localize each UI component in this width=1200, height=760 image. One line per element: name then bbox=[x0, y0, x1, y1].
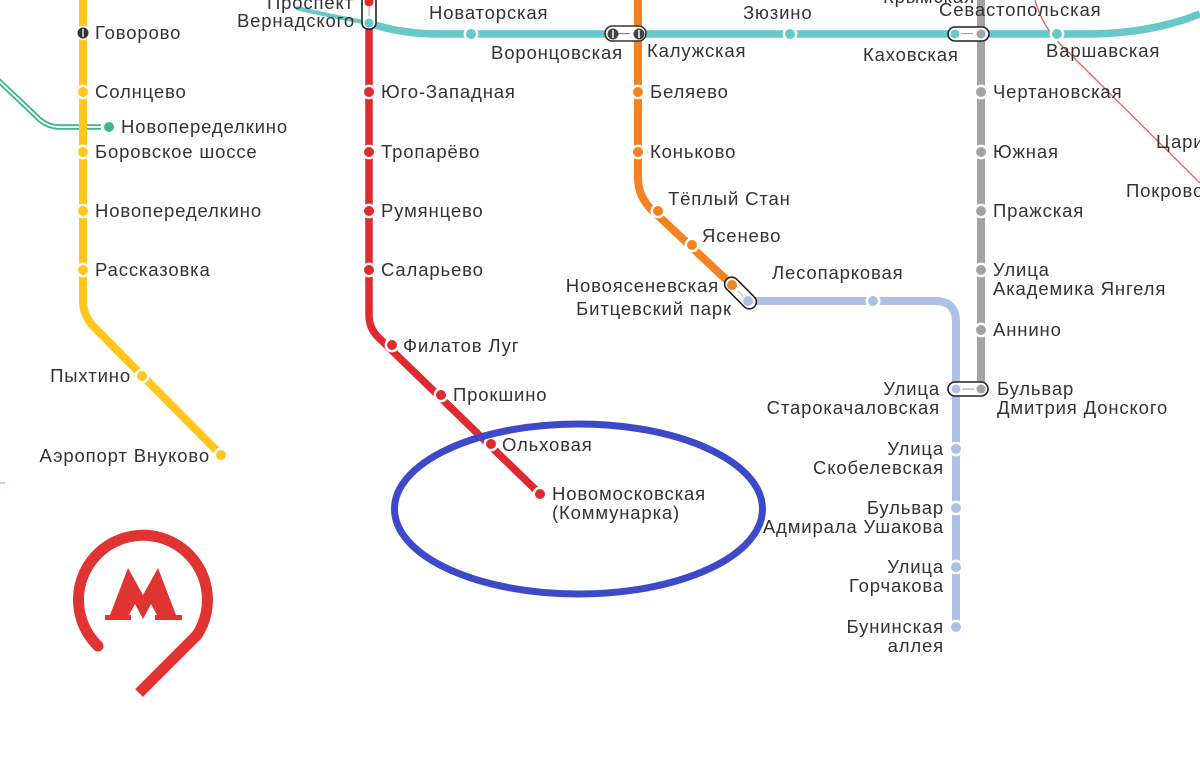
station labels: periwinkle line: Скобелевская bbox=[813, 457, 944, 478]
station labels: orange line: Коньково bbox=[650, 141, 736, 162]
interchange: Novoyasenevskaya / Bitsevsky park bbox=[722, 274, 759, 312]
station labels: periwinkle line: Адмирала Ушакова bbox=[763, 516, 944, 537]
station labels: orange line: Тёплый Стан bbox=[668, 188, 791, 209]
teal line left branch bbox=[296, 8, 369, 23]
station labels: grey line: Академика Янгеля bbox=[993, 278, 1166, 299]
station labels: yellow line: Говорово bbox=[95, 22, 181, 43]
logo start cap bbox=[92, 640, 104, 652]
interchange: Vorontsovskaya / Kaluzhskaya bbox=[605, 26, 646, 41]
station labels: periwinkle line: Старокачаловская bbox=[767, 397, 940, 418]
station labels: orange line: Новоясеневская bbox=[566, 275, 719, 296]
station labels: red line bbox=[237, 0, 706, 523]
station labels: red line: Тропарёво bbox=[381, 141, 480, 162]
station labels: right edge bbox=[1126, 131, 1200, 201]
station labels: periwinkle line: Улица bbox=[883, 378, 940, 399]
highlight ellipse bbox=[394, 424, 762, 594]
station labels: yellow line: Новопеределкино bbox=[95, 200, 262, 221]
station labels: red line: Вернадского bbox=[237, 10, 355, 31]
station labels: red line: (Коммунарка) bbox=[552, 502, 680, 523]
station labels: yellow line bbox=[40, 22, 288, 466]
thin pink line bbox=[1035, 0, 1200, 183]
station labels: grey line: Улица bbox=[993, 259, 1050, 280]
station labels: yellow line: Пыхтино bbox=[50, 365, 131, 386]
station labels: red line: Юго-Западная bbox=[381, 81, 516, 102]
grey line bbox=[977, 0, 985, 389]
logo letter M bbox=[105, 568, 182, 620]
yellow stations bbox=[77, 86, 227, 461]
red stations bbox=[363, 86, 546, 500]
station labels: orange line bbox=[566, 40, 791, 319]
interchange: Kakhovskaya / Sevastopolskaya bbox=[948, 27, 989, 41]
station labels: teal line: Варшавская bbox=[1046, 40, 1160, 61]
station labels: yellow line: Аэропорт Внуково bbox=[40, 445, 210, 466]
station labels: teal line: Новаторская bbox=[429, 2, 548, 23]
station labels: grey line: Пражская bbox=[993, 200, 1084, 221]
station labels: periwinkle line: Бунинская bbox=[847, 616, 944, 637]
station labels: red line: Саларьево bbox=[381, 259, 484, 280]
station labels: red line: Прокшино bbox=[453, 384, 547, 405]
station labels: orange line: Калужская bbox=[647, 40, 746, 61]
station labels: yellow line: Новопеределкино bbox=[121, 116, 288, 137]
station labels: teal line: Воронцовская bbox=[491, 42, 623, 63]
station labels: periwinkle line bbox=[763, 262, 944, 656]
station labels: grey line: Дмитрия Донского bbox=[997, 397, 1168, 418]
station labels: periwinkle line: аллея bbox=[888, 635, 944, 656]
interchange line to Novoperedelkino bbox=[0, 80, 101, 127]
station labels: periwinkle line: Бульвар bbox=[867, 497, 944, 518]
station labels: teal line: Каховская bbox=[863, 44, 959, 65]
periwinkle stations bbox=[867, 295, 962, 633]
station: Govorovo bbox=[76, 26, 90, 40]
station labels: red line: Ольховая bbox=[502, 434, 593, 455]
orange line bbox=[638, 0, 733, 286]
interchange: Prospekt Vernadskogo bbox=[362, 0, 376, 29]
station labels: red line: Румянцево bbox=[381, 200, 484, 221]
Novoperedelkino green station bbox=[104, 122, 114, 132]
grey stations bbox=[975, 86, 987, 336]
red line bbox=[363, 0, 546, 500]
station labels: periwinkle line: Улица bbox=[887, 556, 944, 577]
teal stations bbox=[465, 28, 1063, 40]
station labels: yellow line: Рассказовка bbox=[95, 259, 211, 280]
station labels: teal line: Зюзино bbox=[743, 2, 812, 23]
teal line bbox=[369, 14, 1200, 34]
station labels: grey line bbox=[993, 81, 1168, 418]
station labels: teal line bbox=[429, 0, 1160, 65]
station labels: orange line: Битцевский парк bbox=[576, 298, 732, 319]
small red mark at left edge bbox=[0, 482, 5, 484]
station labels: grey line: Бульвар bbox=[997, 378, 1074, 399]
interchange: Starokachalovskaya / Bulvar Dmitriya Donskogo bbox=[948, 382, 988, 396]
orange stations bbox=[632, 86, 698, 251]
station labels: periwinkle line: Лесопарковая bbox=[772, 262, 904, 283]
station labels: red line: Новомосковская bbox=[552, 483, 706, 504]
periwinkle line bbox=[748, 301, 956, 627]
station labels: yellow line: Солнцево bbox=[95, 81, 187, 102]
station labels: yellow line: Боровское шоссе bbox=[95, 141, 258, 162]
yellow line bbox=[76, 0, 227, 461]
station labels: red line: Филатов Луг bbox=[403, 335, 519, 356]
station labels: orange line: Ясенево bbox=[702, 225, 781, 246]
station labels: periwinkle line: Горчакова bbox=[849, 575, 944, 596]
metro logo bbox=[78, 535, 207, 693]
station labels: orange line: Беляево bbox=[650, 81, 729, 102]
station labels: periwinkle line: Улица bbox=[887, 438, 944, 459]
station labels: grey line: Аннино bbox=[993, 319, 1062, 340]
station labels: grey line: Чертановская bbox=[993, 81, 1122, 102]
station labels: grey line: Южная bbox=[993, 141, 1059, 162]
